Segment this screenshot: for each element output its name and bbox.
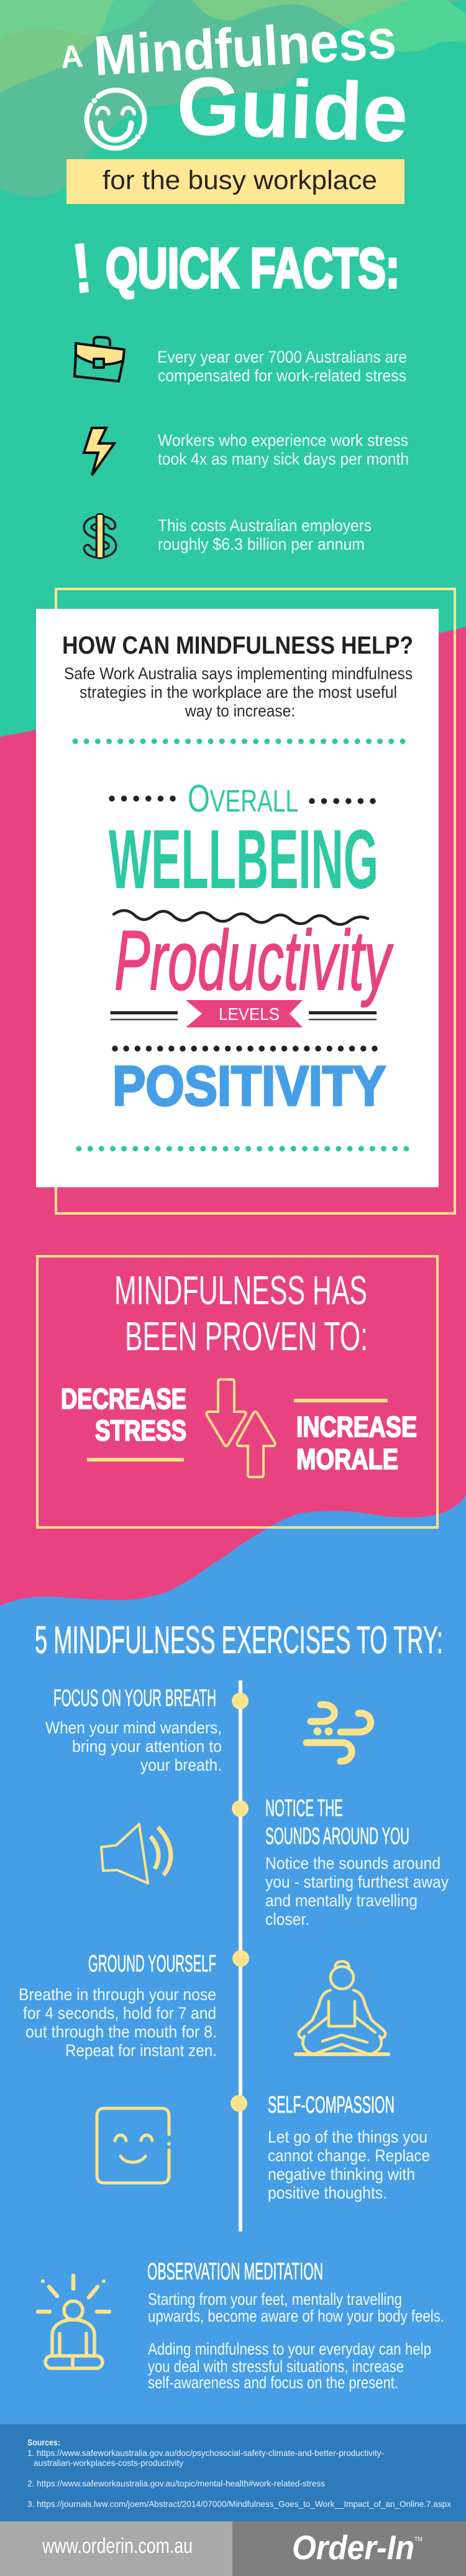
exercise: ground yourself: Repeat for instant zen. <box>65 2041 217 2060</box>
exercise: notice the sounds around you: NOTICE THE <box>265 1795 343 1822</box>
fact: cost: This costs Australian employers <box>158 516 372 535</box>
intro text: way to increase: <box>185 702 295 720</box>
decrease stress <box>61 1383 186 1447</box>
panel: sources <box>0 2424 466 2521</box>
subtitle banner: for the busy workplace <box>103 165 377 195</box>
exercise: notice the sounds around you: closer. <box>265 1910 309 1929</box>
subtitle banner <box>66 159 404 204</box>
intro text <box>64 664 413 720</box>
heading: quick facts <box>68 228 400 308</box>
decrease stress: DECREASE <box>61 1383 186 1415</box>
panel: mindfulness has been proven to <box>37 1256 437 1527</box>
levels ribbon: LEVELS <box>219 1004 280 1024</box>
fact: cost: roughly $6.3 billion per annum <box>158 535 365 554</box>
header background blobs <box>0 0 466 197</box>
exercise: focus on your breath <box>45 1685 222 1774</box>
icon: lightning bolt <box>84 428 114 475</box>
panel: sources: 3. https://journals.lww.com/joem/Abstract/2014/07000/Mindfulness_Goes_to_Work__Impact_of_an_Online.7.aspx <box>27 2499 451 2509</box>
exercise: focus on your breath: When your mind wanders, <box>45 1718 222 1737</box>
exercise: self-compassion <box>268 2092 430 2202</box>
icon: observation meditation <box>38 2276 109 2368</box>
heading: quick facts: ! <box>68 228 95 308</box>
panel: sources: australian-workplaces-costs-productivity <box>34 2458 183 2468</box>
dotted divider bottom <box>79 1146 406 1152</box>
exercise: notice the sounds around you: and mentally travelling <box>265 1891 418 1910</box>
fact: compensation <box>157 348 407 385</box>
intro text: strategies in the workplace are the most useful <box>80 683 397 702</box>
heading: how can mindfulness help: HOW CAN MINDFULNESS HELP? <box>62 632 413 659</box>
exercise: self-compassion: positive thoughts. <box>268 2184 387 2202</box>
fact: compensation: Every year over 7000 Australians are <box>157 348 407 366</box>
footer: logo <box>232 2521 466 2576</box>
exercise: observation meditation: you deal with stressful situations, increase <box>148 2357 404 2376</box>
icon: dollar sign <box>88 513 112 559</box>
icon: smiling square <box>97 2108 171 2183</box>
dotted divider dark <box>115 1045 375 1052</box>
exercise: observation meditation: self-awareness and focus on the present. <box>148 2373 398 2392</box>
overall row: OVERALL <box>188 777 298 820</box>
title: Mindfulness <box>92 8 398 88</box>
footer: website <box>0 2521 232 2576</box>
footer: logo: Order-In <box>292 2528 414 2567</box>
positivity: POSITIVITY <box>112 1055 386 1118</box>
footer: website: www.orderin.com.au <box>42 2534 193 2558</box>
icon: seated meditation <box>296 1962 388 2054</box>
exercise: focus on your breath: FOCUS ON YOUR BREATH <box>53 1685 216 1712</box>
exercise: focus on your breath: bring your attention to <box>72 1737 222 1756</box>
fact: sick days: took 4x as many sick days per month <box>158 450 409 468</box>
fact: sick days <box>158 431 409 468</box>
panel: sources: 1. https://www.safeworkaustralia.gov.au/doc/psychosocial-safety-climate-and-better-productivity- <box>27 2448 384 2458</box>
exercise: notice the sounds around you: Notice the sounds around <box>265 1854 441 1873</box>
footer: logo: TM <box>414 2536 423 2543</box>
exercise: self-compassion: Let go of the things you <box>268 2128 427 2146</box>
outline frame behind card <box>56 589 455 1213</box>
exercise: observation meditation: Starting from your feet, mentally travelling <box>148 2290 402 2309</box>
intro text: Safe Work Australia says implementing mindfulness <box>64 664 413 683</box>
levels ribbon <box>111 1000 377 1027</box>
arrow up <box>237 1412 275 1477</box>
title: Guide <box>175 60 409 160</box>
icon: speaker <box>101 1824 171 1883</box>
timeline <box>231 1680 249 2231</box>
exercise: ground yourself <box>19 1951 217 2060</box>
fact: cost <box>158 516 372 554</box>
title: A <box>59 38 85 75</box>
exercise: ground yourself: Breathe in through your nose <box>19 1985 216 2004</box>
panel: how can mindfulness help <box>36 609 439 1187</box>
title <box>59 8 409 160</box>
panel: sources: Sources: <box>27 2437 60 2447</box>
wavy divider <box>114 910 368 924</box>
panel: sources: 2. https://www.safeworkaustralia.gov.au/topic/mental-health#work-related-stress <box>27 2478 325 2488</box>
exercise: notice the sounds around you <box>265 1795 449 1929</box>
exercise: observation meditation: OBSERVATION MEDITATION <box>147 2259 323 2285</box>
dotted divider top <box>75 739 403 744</box>
panel heading <box>114 1267 368 1359</box>
fact: compensation: compensated for work-related stress <box>158 366 406 385</box>
exercise: focus on your breath: your breath. <box>140 1756 222 1774</box>
exercise: ground yourself: for 4 seconds, hold for 7 and <box>23 2004 216 2022</box>
exercise: ground yourself: out through the mouth for 8. <box>25 2022 217 2041</box>
decrease stress: STRESS <box>95 1414 186 1447</box>
increase morale <box>296 1411 417 1475</box>
increase morale: INCREASE <box>296 1411 417 1443</box>
exercise: self-compassion: negative thinking with <box>268 2165 415 2184</box>
increase morale: MORALE <box>296 1443 398 1475</box>
exercise: self-compassion: cannot change. Replace <box>268 2146 430 2165</box>
icon: briefcase <box>75 337 124 381</box>
icon: breath <box>306 1705 371 1761</box>
exercise: ground yourself: GROUND YOURSELF <box>88 1951 216 1977</box>
arrow down <box>206 1379 246 1446</box>
exercise: observation meditation <box>147 2259 444 2392</box>
icon: smiley face <box>87 90 145 148</box>
exercise: notice the sounds around you: you - starting furthest away <box>265 1873 449 1891</box>
fact: sick days: Workers who experience work stress <box>158 431 408 450</box>
